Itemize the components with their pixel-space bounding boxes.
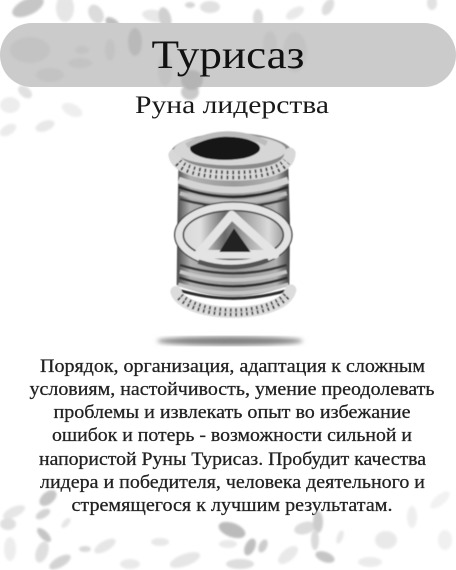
- body paragraph: условиям, настойчивость, умение преодолевать: [30, 379, 435, 400]
- bottom braided ring: [176, 290, 291, 312]
- rune oval panel: [178, 206, 288, 264]
- body paragraph: Порядок, организация, адаптация к сложным: [40, 356, 425, 377]
- body paragraph: [30, 356, 435, 516]
- body paragraph: стремящегося к лучшим результатам.: [72, 495, 392, 516]
- body paragraph: напористой Руны Турисаз. Пробудит качества: [39, 449, 427, 470]
- top braided ring: [170, 133, 294, 177]
- title: Турисаз: [152, 32, 304, 77]
- bead shadow: [157, 336, 303, 346]
- background leaves: top: [0, 0, 437, 139]
- rune bead image: [157, 133, 303, 346]
- lower crescent: [198, 260, 268, 267]
- subtitle: Руна лидерства: [135, 92, 329, 119]
- body paragraph: ошибок и потерь - возможности сильной и: [52, 425, 412, 446]
- lower grooves: [180, 265, 287, 273]
- body paragraph: лидера и победителя, человека деятельного и: [40, 472, 425, 493]
- bead body: [177, 168, 290, 297]
- body paragraph: проблемы и извлекать опыт во избежание: [54, 402, 411, 423]
- rune triangle: [198, 215, 275, 254]
- background leaves: bottom: [0, 487, 452, 570]
- bead hole: [190, 137, 260, 160]
- title pill: [0, 23, 456, 90]
- upper grooves: [179, 180, 288, 190]
